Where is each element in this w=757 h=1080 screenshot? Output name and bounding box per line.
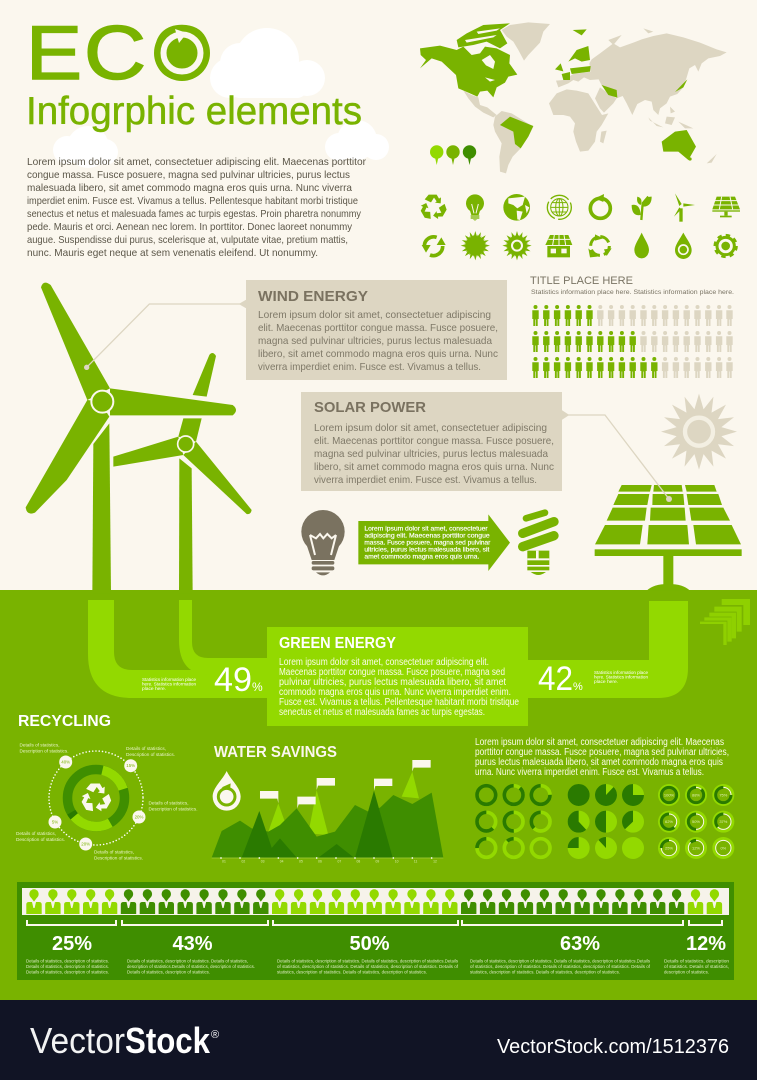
panel: solar power: SOLAR POWER: [314, 399, 426, 416]
stat: 42 percent: [538, 660, 648, 698]
title: ECO: E: [26, 11, 82, 96]
energy pipes: [88, 600, 688, 698]
clouds: [53, 28, 389, 168]
watermark logo: ®: [211, 1029, 219, 1041]
recycling donut chart: Description of statistics.: [148, 806, 198, 812]
icon: water drop: [634, 233, 649, 258]
stat descriptions: Details of statistics, description of statistics. Details of statistics, description of statistics.Details: [277, 958, 459, 964]
watermark logo: Stock: [125, 1020, 211, 1061]
water savings chart: 11: [414, 860, 418, 864]
right text block: urna. Nunc viverra imperdiet enim. Fusce est. Vivamus a tellus.: [475, 767, 704, 778]
stat: 49 percent: [142, 661, 263, 699]
chevron decoration: [700, 599, 750, 645]
icon: solar panel: [712, 197, 740, 217]
stat: 49 percent: here. Statistics information: [142, 682, 196, 686]
stat: 49 percent: Statistics information place: [142, 677, 196, 682]
icon: beige sun: [661, 394, 737, 470]
people chart: title: Statistics information place here. Statistics information place here.: [531, 289, 734, 296]
recycling donut chart: 15%: [126, 763, 135, 768]
eco icon set: [419, 193, 740, 260]
icon: web globe: [547, 195, 571, 219]
panel: green energy: GREEN ENERGY: [279, 635, 397, 652]
background: cream upper section: [0, 0, 757, 590]
right text block: [475, 737, 729, 778]
percentages: 50%: [349, 933, 390, 955]
recycling donut chart: Details of statistics,: [126, 746, 166, 751]
icon: cfl bulb: [523, 513, 554, 575]
footer bar: [0, 1000, 757, 1080]
percentages: 12%: [686, 933, 726, 955]
recycling donut chart: Details of statistics,: [148, 800, 188, 806]
stat descriptions: Details of statistics, description: [664, 958, 729, 964]
labelled percentage rings: 25%: [665, 845, 673, 850]
intro paragraph: senectus et netus et malesuada fames ac turpis egestas. Proin pharetra nonummy: [27, 209, 362, 220]
world map: [420, 22, 727, 173]
icon: sun: [461, 231, 490, 260]
icon: globe: [503, 194, 530, 221]
icon: solar house: [545, 235, 572, 257]
intro paragraph: Lorem ipsum dolor sit amet, consectetuer adipiscing elit. Maecenas porttitor: [27, 157, 367, 168]
stat descriptions: Details of statistics, description of statistics. Details of statistics, description of statistics.Details: [470, 958, 651, 964]
icon: sun with ring: [502, 231, 532, 260]
map legend pins: [430, 145, 476, 165]
people chart: title: TITLE PLACE HERE: [530, 275, 633, 287]
water savings chart: [212, 760, 443, 864]
recycling donut chart: 40%: [61, 760, 70, 764]
icon: windmill: [674, 193, 695, 222]
panel: green energy: Maecenas porttitor congue massa. Fusce posuere, magna sed: [279, 667, 505, 678]
labelled percentage rings: 62%: [665, 819, 673, 824]
recycling donut chart: Details of statistics,: [20, 742, 60, 748]
stat descriptions: Details of statistics, description of statistics.: [127, 970, 210, 974]
intro paragraph: imperdiet enim. Fusce est. Vivamus a tellus. Pellentesque habitant morbi tristique: [27, 196, 358, 207]
labelled percentage rings: 50%: [692, 819, 700, 824]
small turbine: [113, 353, 252, 593]
intro paragraph: [27, 157, 367, 259]
stat descriptions: Details of statistics, description of statistics.: [26, 970, 109, 974]
title: ECO: C: [84, 11, 146, 96]
stat descriptions: of statistics. Details of statistics,: [664, 964, 729, 969]
panel: wind energy: viverra imperdiet enim. Fusce est. Vivamus a tellus.: [258, 362, 481, 373]
wind turbines: [26, 283, 252, 593]
recycling donut chart: 20%: [135, 814, 143, 820]
panel: green energy: Fusce est. Vivamus a tellus. Pellentesque habitant morbi tristique: [279, 697, 519, 708]
icon: plant: [632, 197, 652, 220]
stat: 42 percent: Statistics information place: [594, 670, 648, 675]
icon: refresh ring: [590, 194, 610, 218]
stat: 42 percent: place here.: [594, 679, 618, 684]
percentages: [52, 933, 726, 955]
panel: wind energy: [246, 280, 507, 380]
intro paragraph: malesuada libero, sit amet commodo magna eros quis urna. Nunc viverra: [27, 183, 352, 194]
icon: arrows pair: [422, 237, 446, 256]
icon: water drop: [213, 771, 241, 811]
stat descriptions: [26, 958, 729, 974]
recycling donut chart: 5%: [52, 820, 58, 824]
stat descriptions: Details of statistics, description of statistics. Details of statistics,: [127, 958, 248, 964]
watermark logo: [30, 1020, 219, 1061]
stat descriptions: description of statistics.: [664, 970, 709, 974]
wind connector line: [84, 299, 247, 370]
panel: population statistics: [17, 882, 734, 980]
panel: wind energy: libero, sit amet commodo magna eros quis urna. Nunc: [258, 349, 498, 360]
stat descriptions: Details of statistics, description of statistics.: [26, 958, 109, 964]
panel: solar power: magna sed pulvinar ultricies, purus lectus malesuada: [314, 449, 548, 460]
recycling donut chart: Description of statistics.: [126, 752, 175, 757]
labelled percentage rings: 0%: [720, 845, 727, 850]
water savings chart: 08: [356, 860, 360, 864]
panel: solar power: libero, sit amet commodo magna eros quis urna. Nunc: [314, 462, 554, 473]
intro paragraph: pede. Mauris et orci. Aenean nec lorem. In porttitor. Donec laoreet nonummy: [27, 222, 353, 233]
intro paragraph: augue. Suspendisse dui purus, scelerisque at, vulputate vitae, pretium mattis,: [27, 235, 348, 246]
icon: gear: [715, 235, 736, 257]
solar scene: [301, 394, 742, 591]
recycling donut chart: Details of statistics,: [94, 850, 134, 854]
panel: wind energy: Lorem ipsum dolor sit amet, consectetuer adipiscing: [258, 310, 491, 321]
brackets: [27, 920, 722, 925]
stat descriptions: of statistics, description of statistics. Details of statistics, description of statistics. Details of: [470, 964, 651, 969]
solar connector line: [562, 410, 672, 502]
stat: 49 percent: place here.: [142, 686, 166, 691]
recycling donut chart: Description of statistics.: [94, 856, 143, 860]
arrow callout: Lorem ipsum dolor sit amet, consectetuer: [364, 527, 488, 533]
water savings chart: 05: [299, 860, 303, 864]
panel: wind energy: elit. Maecenas porttitor congue massa. Fusce posuere,: [258, 323, 498, 334]
panel: green energy: commodo magna eros quis urna. Nunc viverra imperdiet enim.: [279, 687, 511, 698]
background: green lower section: [0, 590, 757, 1000]
percentages: 43%: [172, 933, 213, 955]
labelled percentage rings: 75%: [719, 792, 728, 797]
arrow callout: [358, 514, 510, 571]
arrow callout: amet commodo magna eros quis urna.: [364, 555, 480, 561]
panel: green energy: senectus et netus et malesuada fames ac turpis egestas.: [279, 707, 485, 718]
water savings chart: 09: [375, 860, 379, 864]
labelled percentage rings: [658, 784, 734, 859]
arrow callout: adipiscing elit. Maecenas porttitor congue: [364, 534, 490, 540]
stat: 49 percent: 49: [214, 661, 252, 699]
watermark logo: Vector: [30, 1020, 125, 1061]
arrow callout: ultricies, purus lectus malesuada libero, sit: [364, 548, 490, 554]
water savings chart: 07: [337, 860, 341, 864]
stat descriptions: of statistics, description of statistics. Details of statistics, description of statistics. Details of: [277, 964, 459, 969]
panel: solar power: Lorem ipsum dolor sit amet, consectetuer adipiscing: [314, 423, 547, 434]
panel: solar power: viverra imperdiet enim. Fusce est. Vivamus a tellus.: [314, 475, 537, 486]
water savings chart: 10: [395, 860, 399, 864]
stat descriptions: Details of statistics, description of statistics.: [26, 964, 109, 969]
water savings chart: 02: [241, 860, 245, 864]
pie charts: [568, 784, 644, 859]
intro paragraph: nunc. Mauris eget neque at sem venenatis eleifend. Ut nonummy.: [27, 248, 318, 259]
heading: recycling: RECYCLING: [18, 713, 111, 730]
panel: green energy: pulvinar ultricies, purus lectus malesuada libero, sit amet: [279, 677, 506, 688]
percentages: 25%: [52, 933, 92, 955]
icon: cycle arrows: [588, 234, 612, 257]
icon: drop with ring: [675, 233, 692, 259]
recycling donut chart: [16, 742, 198, 860]
big turbine: [26, 283, 236, 593]
stat descriptions: description of statistics.Details of statistics, description of statistics.: [127, 964, 255, 969]
intro paragraph: congue massa. Fusce posuere, magna sed pulvinar ultricies, purus lectus: [27, 170, 350, 181]
labelled percentage rings: 37%: [719, 819, 728, 824]
stat: 42 percent: 42: [538, 660, 573, 698]
labelled percentage rings: 88%: [692, 792, 700, 797]
recycling donut chart: 20%: [81, 842, 90, 846]
water savings chart: 06: [318, 860, 322, 864]
recycling donut chart: Details of statistics,: [16, 831, 56, 836]
panel: wind energy: magna sed pulvinar ultricies, purus lectus malesuada: [258, 336, 492, 347]
water savings chart: 12: [433, 860, 437, 864]
stat descriptions: statistics, description of statistics. Details of statistics, description of statistics.: [277, 970, 427, 974]
stat: 42 percent: %: [573, 681, 583, 693]
subtitle: Infogrphic elements: [26, 90, 362, 133]
water savings chart: 03: [261, 860, 265, 864]
recycling donut chart: Description of statistics.: [16, 837, 65, 842]
labelled percentage rings: 12%: [692, 845, 700, 850]
percentages: 63%: [560, 933, 600, 955]
panel: green energy: [267, 627, 528, 726]
people strip: [26, 889, 722, 914]
panel: solar power: [301, 392, 562, 491]
panel: solar power: elit. Maecenas porttitor congue massa. Fusce posuere,: [314, 436, 554, 447]
labelled percentage rings: 100%: [664, 792, 675, 797]
icon: incandescent bulb: [301, 510, 345, 575]
icon: recycle: [419, 195, 449, 221]
title: ECO: [26, 11, 212, 96]
heading: water savings: WATER SAVINGS: [214, 744, 337, 761]
water savings chart: 01: [222, 860, 226, 864]
water savings chart: 04: [280, 860, 284, 864]
arrow callout: massa. Fusce posuere, magna sed pulvinar: [364, 541, 490, 547]
people chart: title: [530, 275, 734, 296]
title: ECO: O: [152, 11, 212, 96]
recycling donut chart: Description of statistics.: [20, 748, 68, 754]
solar panel: [595, 485, 742, 591]
stat: 42 percent: here. Statistics information: [594, 674, 648, 680]
stat descriptions: statistics, description of statistics. Details of statistics, description of statistics.: [470, 970, 620, 974]
stat: 49 percent: %: [252, 680, 263, 694]
ring charts: [477, 786, 550, 857]
people chart: [532, 305, 733, 378]
panel: wind energy: WIND ENERGY: [258, 288, 368, 305]
icon: bulb: [466, 194, 484, 221]
panel: green energy: Lorem ipsum dolor sit amet, consectetuer adipiscing elit.: [279, 657, 489, 668]
watermark id: VectorStock.com/1512376: [497, 1036, 729, 1058]
